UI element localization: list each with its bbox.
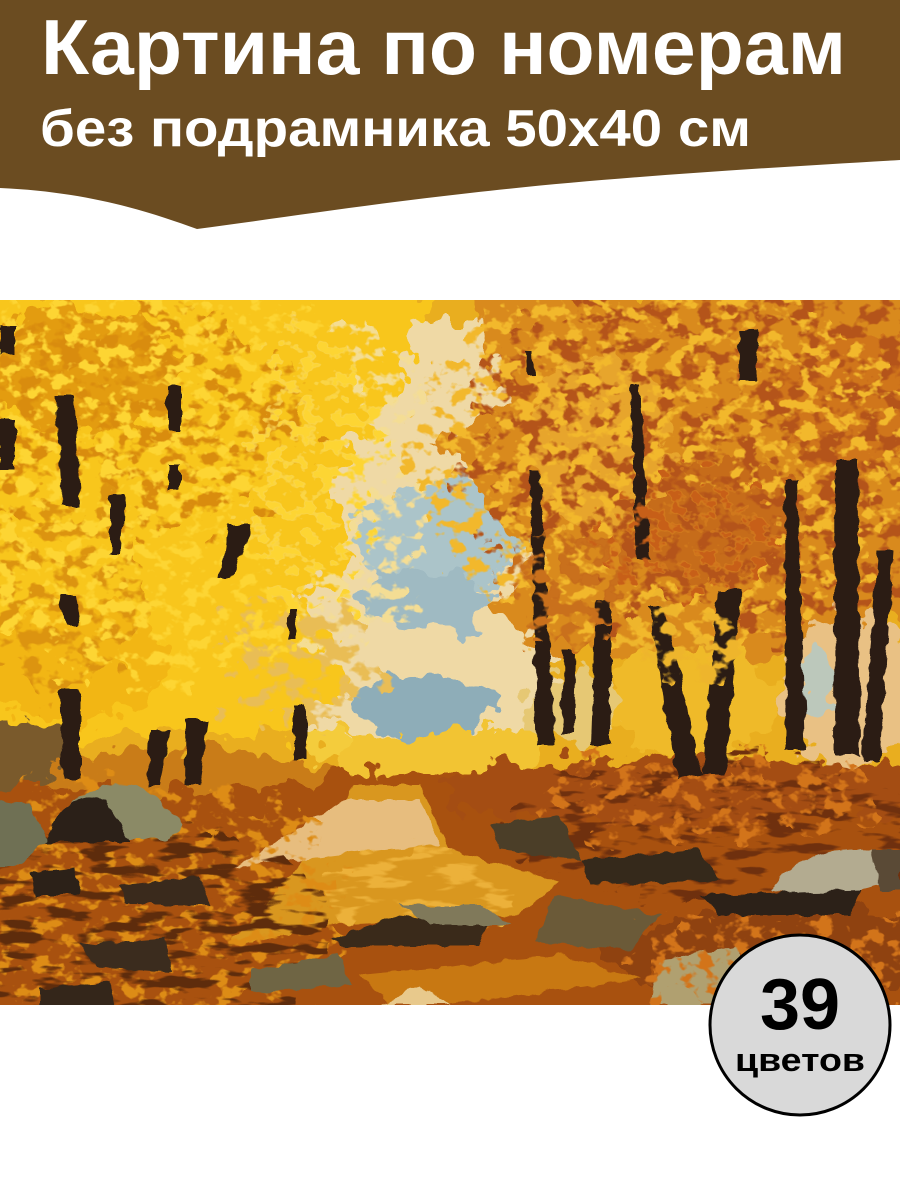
painting base: [40, 300, 900, 774]
pale patches at canopy edge: [250, 310, 430, 650]
badge: 39 colours: [710, 935, 890, 1115]
badge circle: [710, 935, 890, 1115]
title: Картина по номерам: [41, 3, 846, 91]
rocks: [0, 785, 900, 1010]
orange patches in the left canopy: [0, 310, 310, 530]
foliage over trunks: [500, 470, 780, 680]
dark rust patches on right: [470, 260, 900, 640]
badge number: 39: [760, 965, 840, 1045]
subtitle: без подрамника 50х40 см: [40, 100, 751, 158]
painting: autumn forest path: [0, 260, 900, 1040]
bright patches on right: [400, 270, 900, 650]
header banner: [0, 0, 900, 229]
left golden tree canopy: [0, 290, 430, 735]
forest path: [230, 785, 740, 1005]
sky and distant mist: [280, 320, 560, 755]
ground: [0, 719, 900, 1040]
tree trunks: [0, 325, 893, 785]
bright yellow on left: [0, 260, 380, 680]
ground texture: [0, 775, 350, 1025]
right orange tree canopy: [440, 290, 900, 670]
light between right trunks: [520, 615, 900, 765]
mottled foliage patches: [0, 260, 900, 1040]
badge label: цветов: [735, 1042, 865, 1078]
